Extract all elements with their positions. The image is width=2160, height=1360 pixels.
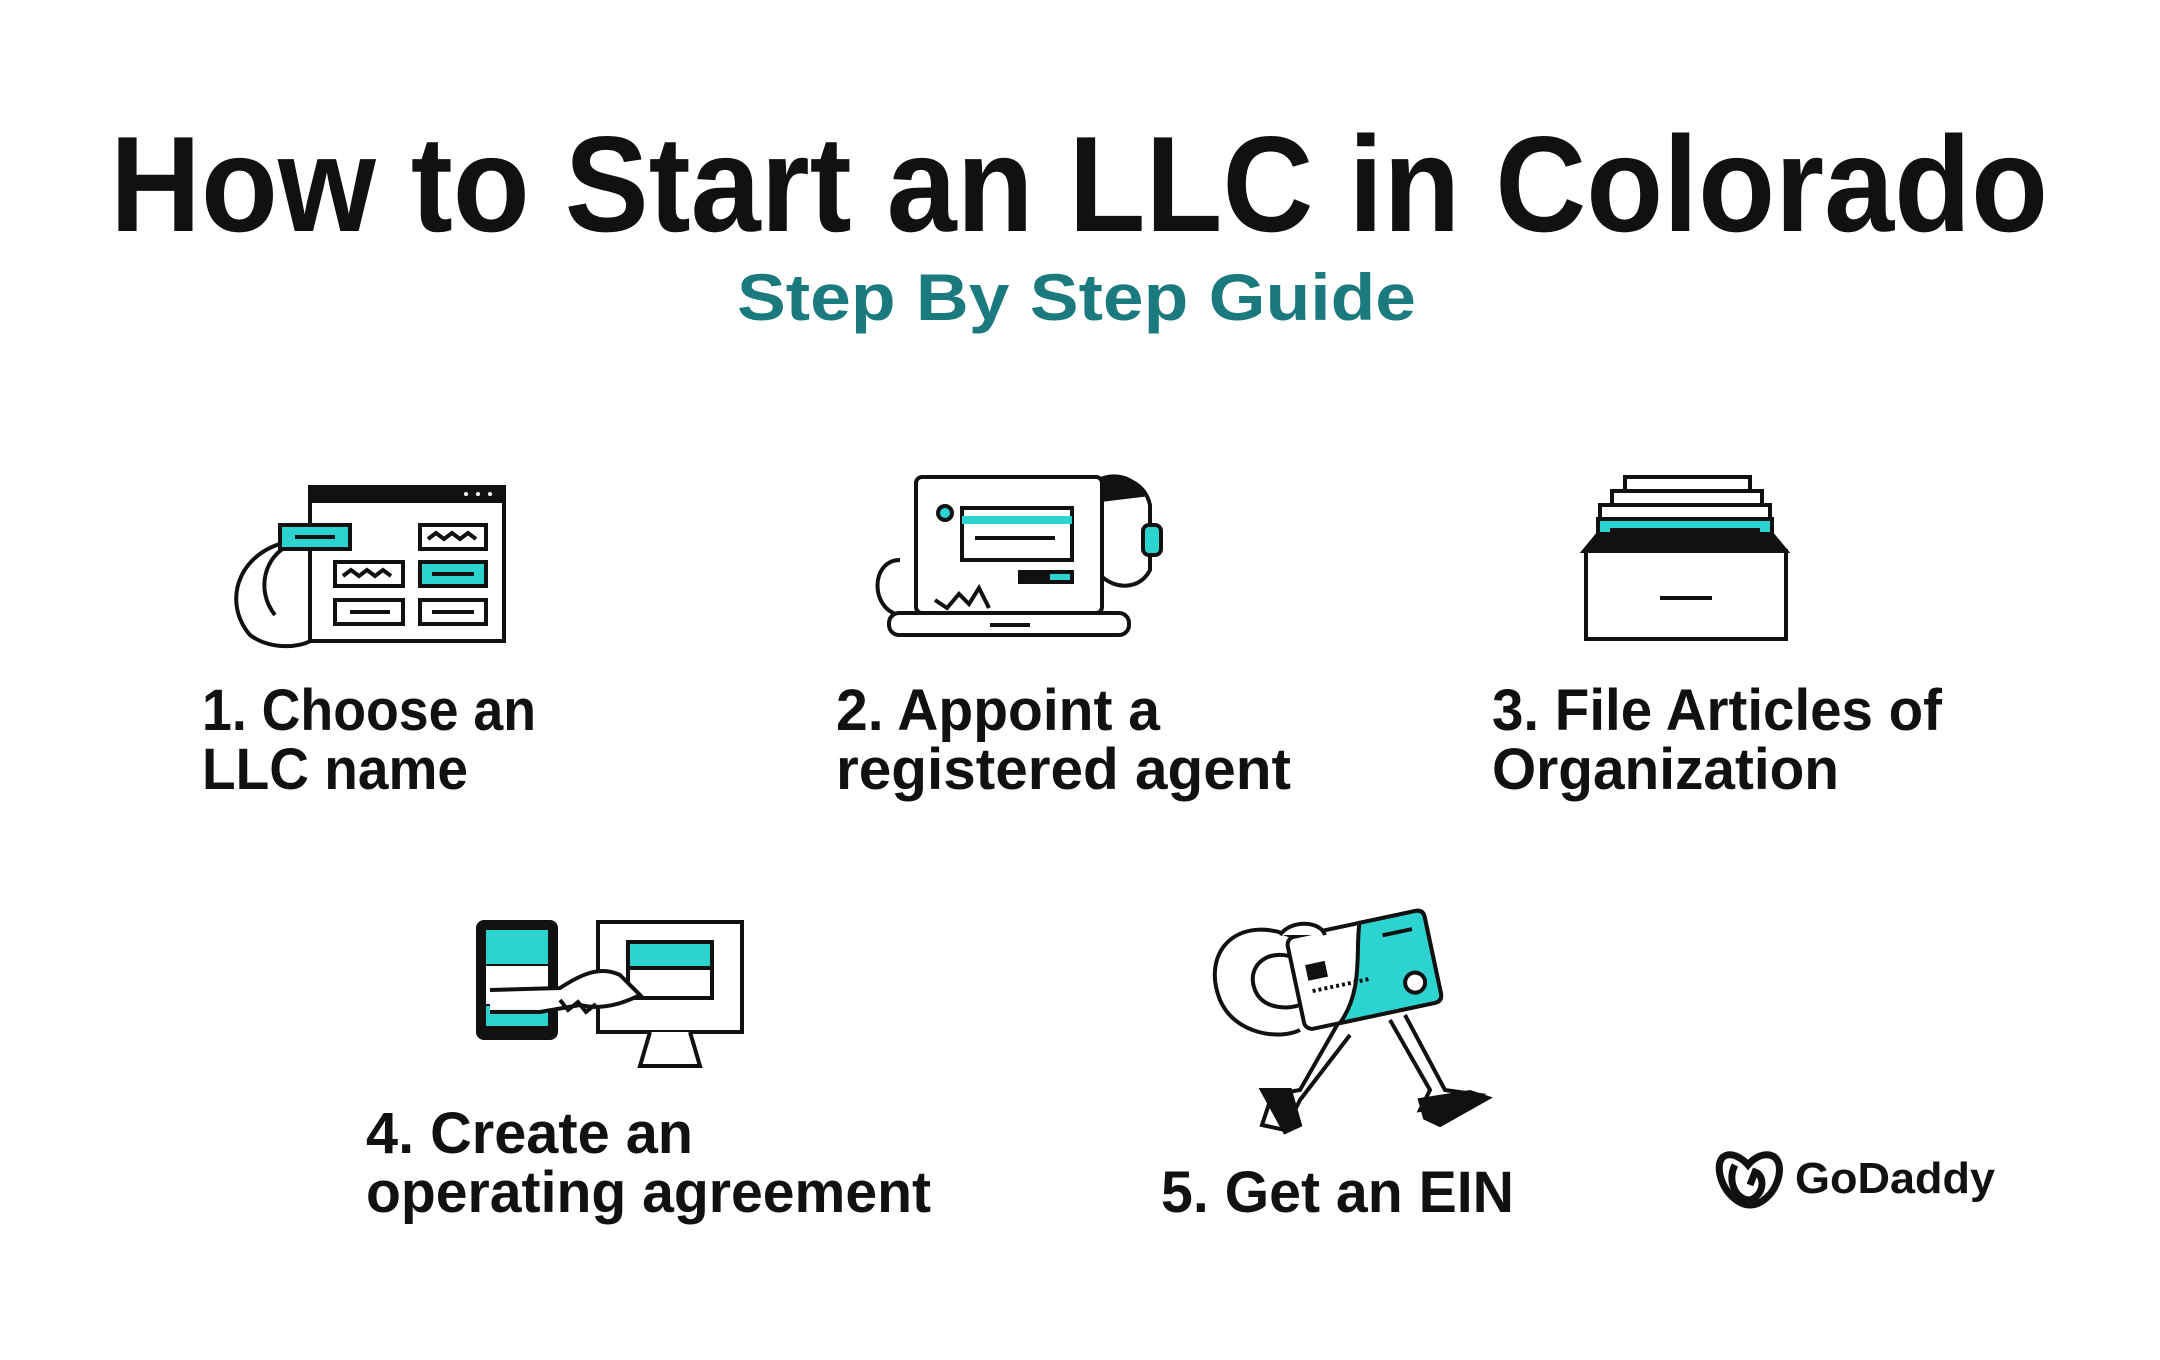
step 1 text: LLC name	[202, 737, 468, 802]
step 4 text	[366, 1101, 931, 1225]
title: How to Start an LLC in Colorado	[110, 108, 2048, 260]
step 2 text: registered agent	[836, 737, 1291, 802]
icon: handshake between phone and monitor	[478, 922, 742, 1066]
step 4 text: operating agreement	[366, 1160, 931, 1225]
icon: walking credit card	[1215, 909, 1488, 1132]
step 1 text: 1. Choose an	[202, 678, 536, 743]
step 5 text: 5. Get an EIN	[1161, 1160, 1514, 1225]
logo: GoDaddy	[1719, 1154, 1996, 1205]
step 4 text: 4. Create an	[366, 1101, 693, 1166]
icon: GoDaddy heart	[1719, 1155, 1779, 1205]
step 3 text: Organization	[1492, 737, 1839, 802]
icon: browser with name choices	[236, 487, 504, 646]
step 2 text	[836, 678, 1291, 802]
step 2 text: 2. Appoint a	[836, 678, 1161, 743]
step 3 text	[1492, 678, 1943, 802]
step 1 text	[202, 678, 536, 802]
icon: file cabinet	[1584, 477, 1786, 639]
subtitle: Step By Step Guide	[737, 260, 1416, 334]
logo: GoDaddy: GoDaddy	[1795, 1154, 1996, 1203]
icon: computer with registered agent	[878, 476, 1161, 635]
step 3 text: 3. File Articles of	[1492, 678, 1943, 743]
